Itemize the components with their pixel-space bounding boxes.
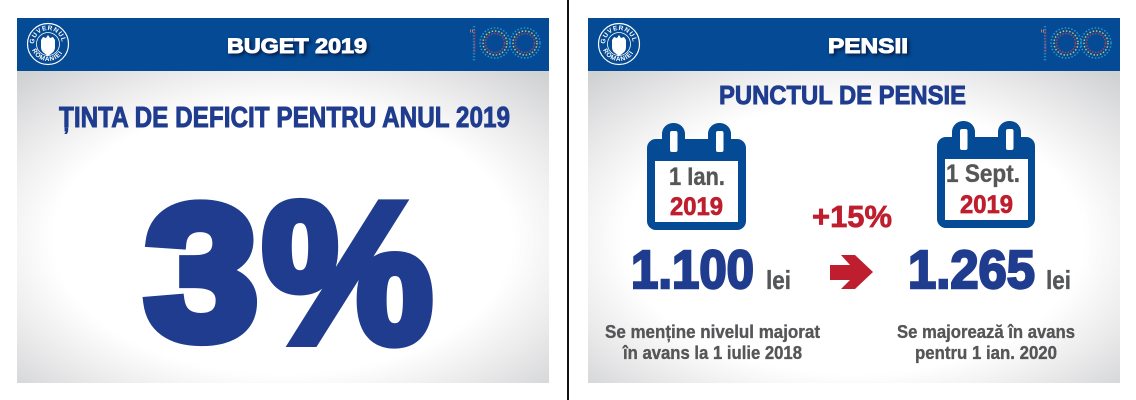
header bar — [588, 18, 1120, 71]
big number: 3%: % — [262, 162, 433, 385]
icon: calendar 1 Sept. 2019: 1 Sept. — [946, 160, 1020, 188]
panel: buget 2019 — [17, 18, 549, 385]
arrow — [830, 255, 873, 289]
panel: pensii — [588, 18, 1120, 383]
icon: centenary 100 logo — [470, 26, 540, 61]
icon: government seal: GUVERNUL — [600, 25, 636, 44]
big number: 3%: 3 — [145, 167, 258, 379]
value: 1.100 lei: lei — [766, 265, 791, 295]
text block: right note: pentru 1 ian. 2020 — [915, 343, 1057, 363]
text block: left note: în avans la 1 iulie 2018 — [622, 343, 802, 363]
icon: calendar 1 Ian. 2019: 1 Ian. — [669, 163, 725, 191]
text block: right note — [897, 322, 1075, 363]
icon: calendar 1 Ian. 2019: 2019 — [670, 193, 723, 221]
big number: 3% — [145, 162, 433, 385]
title: pensii: PENSII — [828, 35, 908, 58]
value: 1.265 lei: 1.265 — [908, 240, 1035, 300]
text block: left note: Se menține nivelul majorat — [605, 322, 820, 342]
value: 1.100 lei: 1.100 — [631, 240, 754, 300]
value: 1.265 lei: lei — [1046, 265, 1071, 295]
icon: centenary 100 logo — [1041, 26, 1111, 61]
heading: punctul de pensie: PUNCTUL DE PENSIE — [719, 80, 966, 110]
header bar — [17, 18, 549, 71]
icon: government seal — [26, 22, 70, 66]
icon: government seal — [598, 22, 640, 66]
icon: government seal: ROMÂNIEI — [603, 48, 634, 61]
icon: calendar 1 Ian. 2019 — [647, 123, 746, 230]
icon: calendar 1 Sept. 2019: 2019 — [960, 191, 1013, 219]
icon: calendar 1 Sept. 2019 — [937, 121, 1035, 228]
callout: +15%: +15% — [812, 199, 892, 234]
divider line — [567, 0, 569, 400]
heading: deficit target: ȚINTA DE DEFICIT PENTRU ANUL 2019 — [59, 102, 510, 134]
text block: left note — [605, 322, 820, 363]
text block: right note: Se majorează în avans — [897, 322, 1075, 342]
icon: government seal: GUVERNUL — [30, 25, 66, 44]
icon: government seal: ROMÂNIEI — [32, 48, 62, 61]
title: buget 2019: BUGET 2019 — [227, 35, 367, 58]
